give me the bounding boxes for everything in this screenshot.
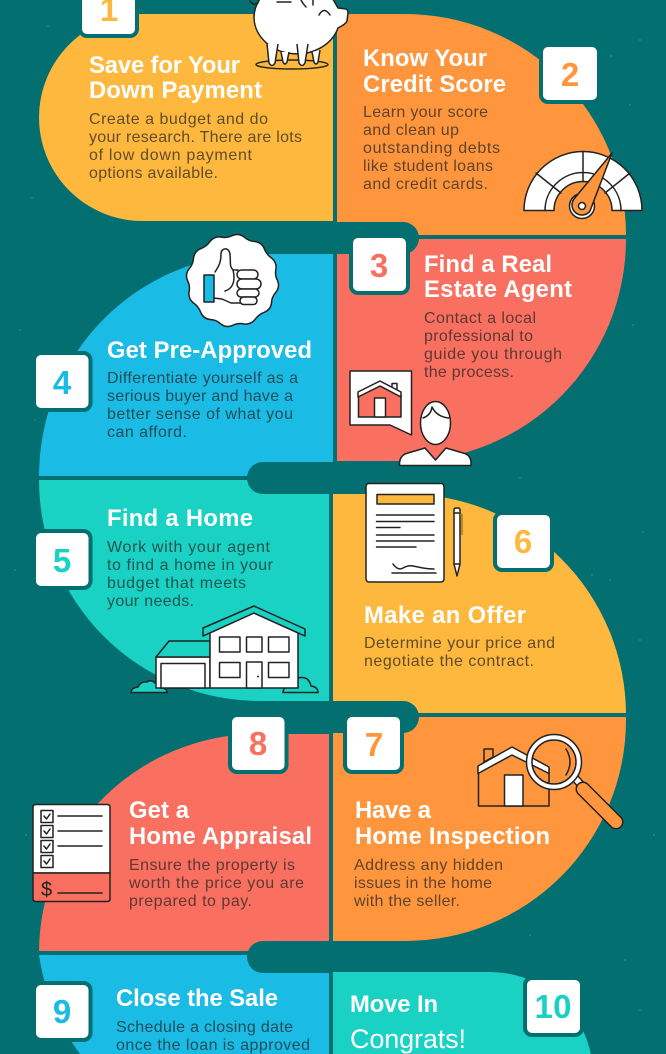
panel: step 4 pre-approved — [34, 234, 333, 476]
heading: Get a — [129, 797, 190, 824]
body text: serious buyer and have a — [107, 388, 293, 405]
heading — [89, 52, 262, 104]
body text: Schedule a closing date — [116, 1019, 293, 1036]
body text: Contact a local — [424, 310, 536, 327]
connector — [247, 941, 340, 973]
body text: and credit cards. — [363, 176, 488, 193]
body text: outstanding debts — [363, 140, 500, 157]
connector — [247, 222, 419, 254]
body text — [128, 857, 304, 910]
heading: Make an Offer — [364, 602, 526, 629]
body text: to find a home in your — [107, 557, 274, 574]
icon: credit gauge — [524, 152, 642, 218]
panel shape — [39, 955, 329, 1054]
body text — [116, 1019, 310, 1054]
badge 9 — [34, 983, 90, 1040]
connector — [300, 701, 419, 733]
body text: worth the price you are — [128, 875, 304, 892]
badge 5: 5 — [53, 542, 71, 579]
body text: professional to — [424, 328, 533, 345]
heading: Down Payment — [89, 77, 262, 104]
panel shape — [39, 480, 329, 701]
body text: and clean up — [363, 122, 459, 139]
body text: Work with your agent — [107, 539, 271, 556]
icon: agent person — [399, 402, 471, 466]
body text — [424, 310, 562, 381]
body text: guide you through — [424, 346, 562, 363]
icon: piggy bank — [250, 0, 348, 69]
body text: Address any hidden — [354, 857, 503, 874]
body text: negotiate the contract. — [364, 653, 534, 670]
heading: Find a Real — [424, 251, 552, 278]
body text: Determine your price and — [364, 635, 555, 652]
body text: options available. — [89, 165, 218, 182]
body text: Congrats! — [350, 1024, 466, 1054]
body text: your research. There are lots — [89, 129, 302, 146]
body text: budget that meets — [107, 575, 246, 592]
heading: Close the Sale — [116, 985, 278, 1012]
connector — [247, 462, 345, 494]
heading: Find a Home — [107, 505, 253, 532]
panel: step 10 move in — [333, 972, 593, 1054]
panel shape — [337, 239, 626, 461]
badge 8: 8 — [249, 725, 267, 762]
heading: Credit Score — [363, 71, 506, 98]
badge 6 — [495, 513, 552, 570]
heading: Know Your — [363, 45, 487, 72]
body text: of low down payment — [89, 147, 253, 164]
heading: Save for Your — [89, 52, 240, 79]
heading — [129, 797, 312, 850]
body text — [107, 370, 298, 441]
badge 4 — [34, 353, 90, 410]
icon: house with garage — [131, 606, 318, 692]
badge 6: 6 — [514, 523, 532, 560]
badge 2: 2 — [561, 56, 579, 93]
body text: with the seller. — [353, 893, 460, 910]
body text — [364, 635, 555, 670]
heading: Move In — [350, 991, 438, 1018]
body text: the process. — [424, 364, 514, 381]
panel: step 8 home appraisal — [33, 715, 329, 951]
heading — [424, 251, 572, 303]
body text — [89, 111, 302, 182]
panel: step 3 real estate agent — [247, 222, 626, 466]
panel shape — [39, 254, 333, 476]
badge 9: 9 — [53, 993, 71, 1030]
body text: once the loan is approved — [116, 1037, 310, 1054]
icon: contract document — [366, 484, 444, 582]
body text — [363, 104, 500, 193]
badge 8 — [230, 715, 286, 772]
body text: like student loans — [363, 158, 493, 175]
icon: house under magnifying glass — [478, 734, 616, 822]
badge 10: 10 — [534, 988, 572, 1025]
badge 7 — [345, 715, 402, 772]
badge 3 — [351, 236, 408, 293]
body text: prepared to pay. — [129, 893, 252, 910]
badge 5 — [34, 531, 90, 588]
panel: step 6 make an offer — [333, 484, 626, 715]
heading: Estate Agent — [424, 276, 572, 303]
badge 2 — [541, 45, 599, 102]
badge 7: 7 — [365, 726, 383, 763]
heading: Get Pre-Approved — [107, 337, 312, 364]
heading — [363, 45, 506, 98]
heading: Home Inspection — [355, 823, 550, 850]
body text: Learn your score — [363, 104, 488, 121]
body text — [107, 539, 274, 610]
icon: speech bubble with house — [350, 371, 412, 435]
icon: appraisal checklist: $ — [41, 879, 52, 901]
heading — [355, 797, 550, 850]
panel: step 9 close the sale — [34, 941, 340, 1054]
icon: thumbs up badge — [186, 234, 279, 327]
panel shape — [333, 717, 626, 941]
panel shape — [39, 14, 333, 221]
body text: Differentiate yourself as a — [107, 370, 298, 387]
badge 10 — [525, 978, 582, 1035]
heading: Have a — [355, 797, 432, 824]
body text: your needs. — [107, 593, 194, 610]
badge 1 — [80, 0, 137, 36]
panel: step 1 down payment — [39, 0, 348, 221]
badge 3: 3 — [370, 247, 388, 284]
panel: step 5 find a home — [34, 462, 345, 701]
body text — [353, 857, 503, 910]
body text: Ensure the property is — [129, 857, 295, 874]
icon: appraisal checklist — [33, 804, 110, 902]
panel shape — [333, 972, 593, 1054]
body text: better sense of what you — [107, 406, 293, 423]
panel shape — [333, 494, 626, 715]
panel shape — [337, 14, 626, 235]
badge 4: 4 — [53, 364, 72, 401]
body text: can afford. — [107, 424, 187, 441]
icon: pen — [454, 508, 462, 576]
body text: issues in the home — [354, 875, 492, 892]
panel: step 2 credit score — [337, 14, 642, 235]
body text: Create a budget and do — [89, 111, 268, 128]
panel shape — [39, 734, 329, 951]
panel: step 7 home inspection — [300, 701, 626, 941]
heading: Home Appraisal — [129, 823, 312, 850]
